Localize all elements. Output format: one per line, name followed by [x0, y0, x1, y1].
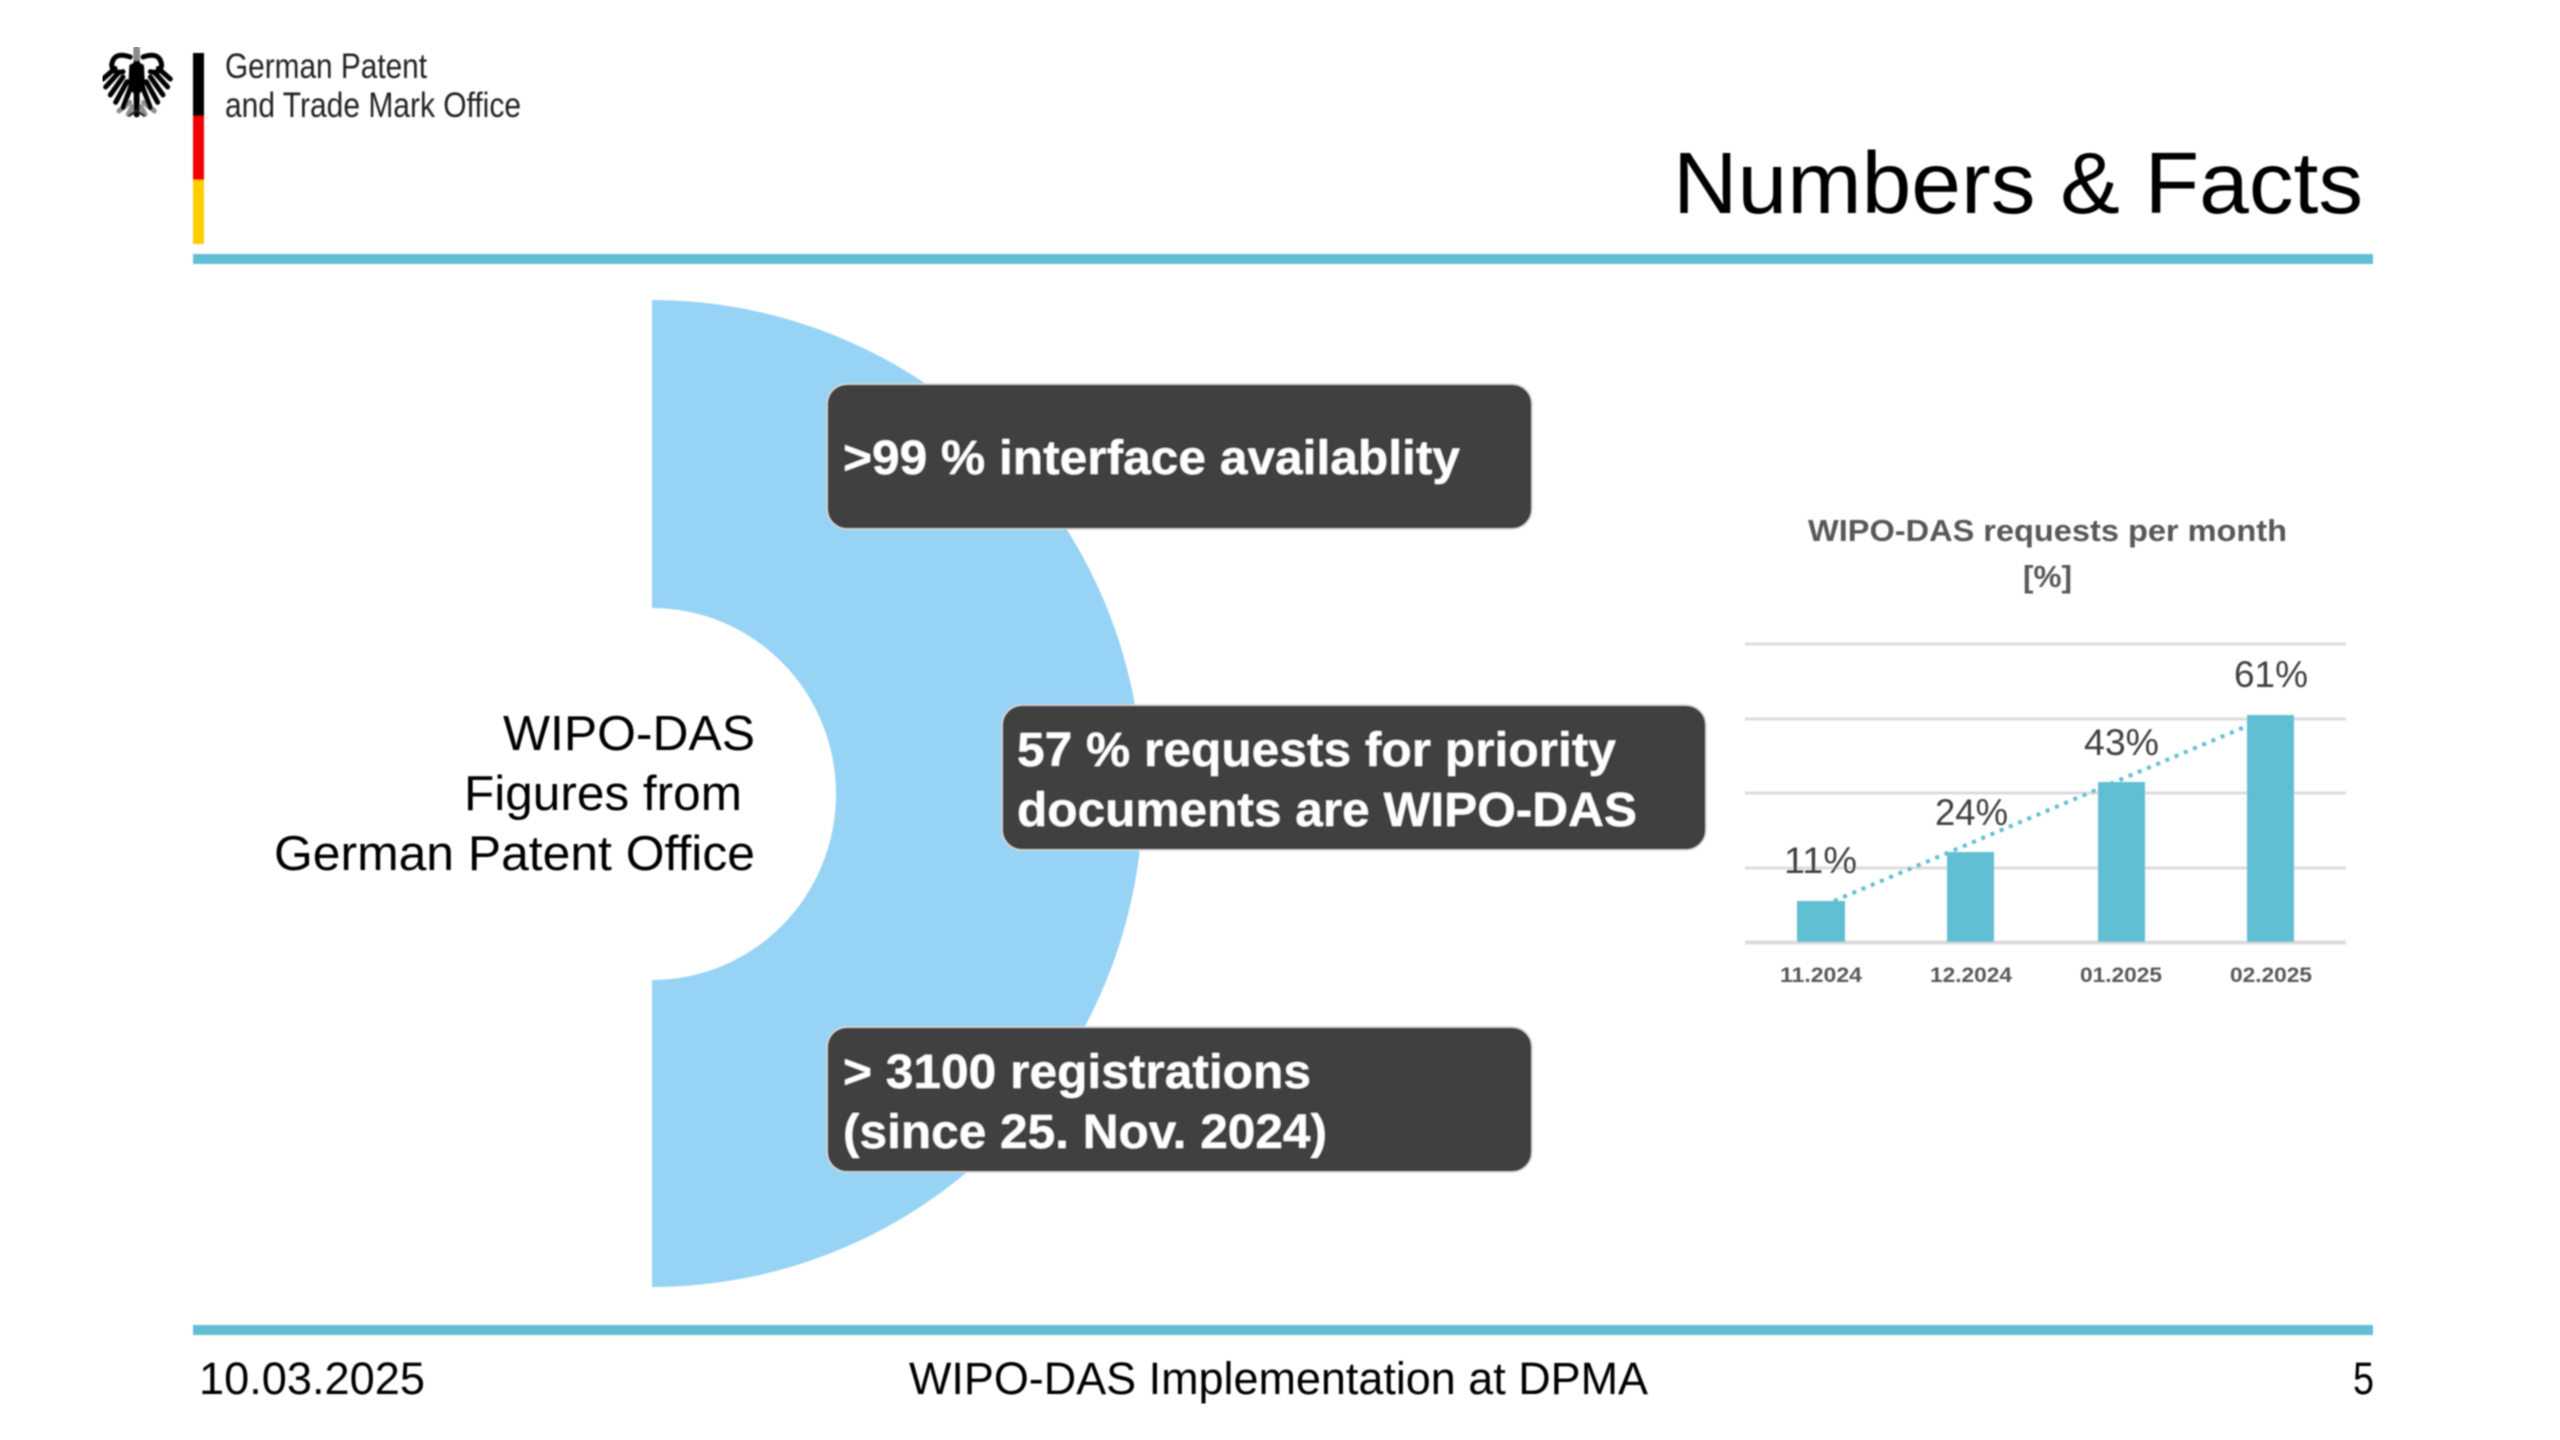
page number: 5 [2353, 1353, 2374, 1404]
footer date: 10.03.2025 [199, 1353, 425, 1404]
logo text [225, 47, 521, 125]
center label: WIPO-DAS Figures from German Patent Office: WIPO-DAS [503, 707, 755, 761]
axis labels: 02.2025 [2230, 964, 2312, 987]
axis labels [1780, 964, 2312, 987]
footer [199, 1353, 2374, 1404]
chart title: WIPO-DAS requests per month [1808, 513, 2287, 548]
center label: WIPO-DAS Figures from German Patent Office: Figures from [464, 767, 742, 821]
bottom rule [193, 1325, 2373, 1335]
axis labels: 11.2024 [1780, 964, 1862, 987]
panel: registrations: (since 25. Nov. 2024) [843, 1106, 1327, 1159]
panel: registrations [827, 1027, 1532, 1172]
center label: WIPO-DAS Figures from German Patent Office: German Patent Office [274, 827, 755, 881]
value labels: 24% [1935, 792, 2008, 833]
axis labels: 01.2025 [2080, 964, 2162, 987]
value labels: 11% [1784, 840, 1857, 881]
panel: interface availability [827, 384, 1532, 529]
title: Numbers & Facts [1673, 135, 2363, 232]
panel: priority document requests: documents are WIPO-DAS [1017, 784, 1637, 837]
center label: WIPO-DAS Figures from German Patent Office [274, 707, 755, 881]
footer presentation title: WIPO-DAS Implementation at DPMA [909, 1353, 1648, 1404]
axis labels: 12.2024 [1930, 964, 2012, 987]
chart title [1808, 513, 2287, 594]
value labels: 43% [2084, 722, 2159, 763]
logo: German Patent and Trade Mark Office [103, 47, 521, 244]
chart title: [%] [2023, 559, 2072, 594]
panel: priority document requests: 57 % requests for priority [1017, 724, 1616, 777]
trend line [1834, 726, 2247, 901]
panel: interface availability: >99 % interface availablity [843, 432, 1460, 485]
logo text: German Patent [225, 47, 427, 86]
top rule [193, 254, 2373, 264]
logo text: and Trade Mark Office [225, 86, 521, 125]
semicircle band [652, 300, 1143, 1287]
flag bar: red [193, 116, 204, 181]
panel: priority document requests [1002, 705, 1706, 850]
flag bar: black [193, 53, 204, 117]
value labels: 61% [2234, 654, 2308, 695]
bar chart: WIPO-DAS requests per month [1745, 513, 2346, 987]
bars [1797, 715, 2294, 942]
flag bar: gold [193, 180, 204, 244]
value labels [1784, 654, 2308, 881]
icon: federal eagle [103, 49, 170, 116]
panel: registrations: > 3100 registrations [843, 1046, 1311, 1099]
